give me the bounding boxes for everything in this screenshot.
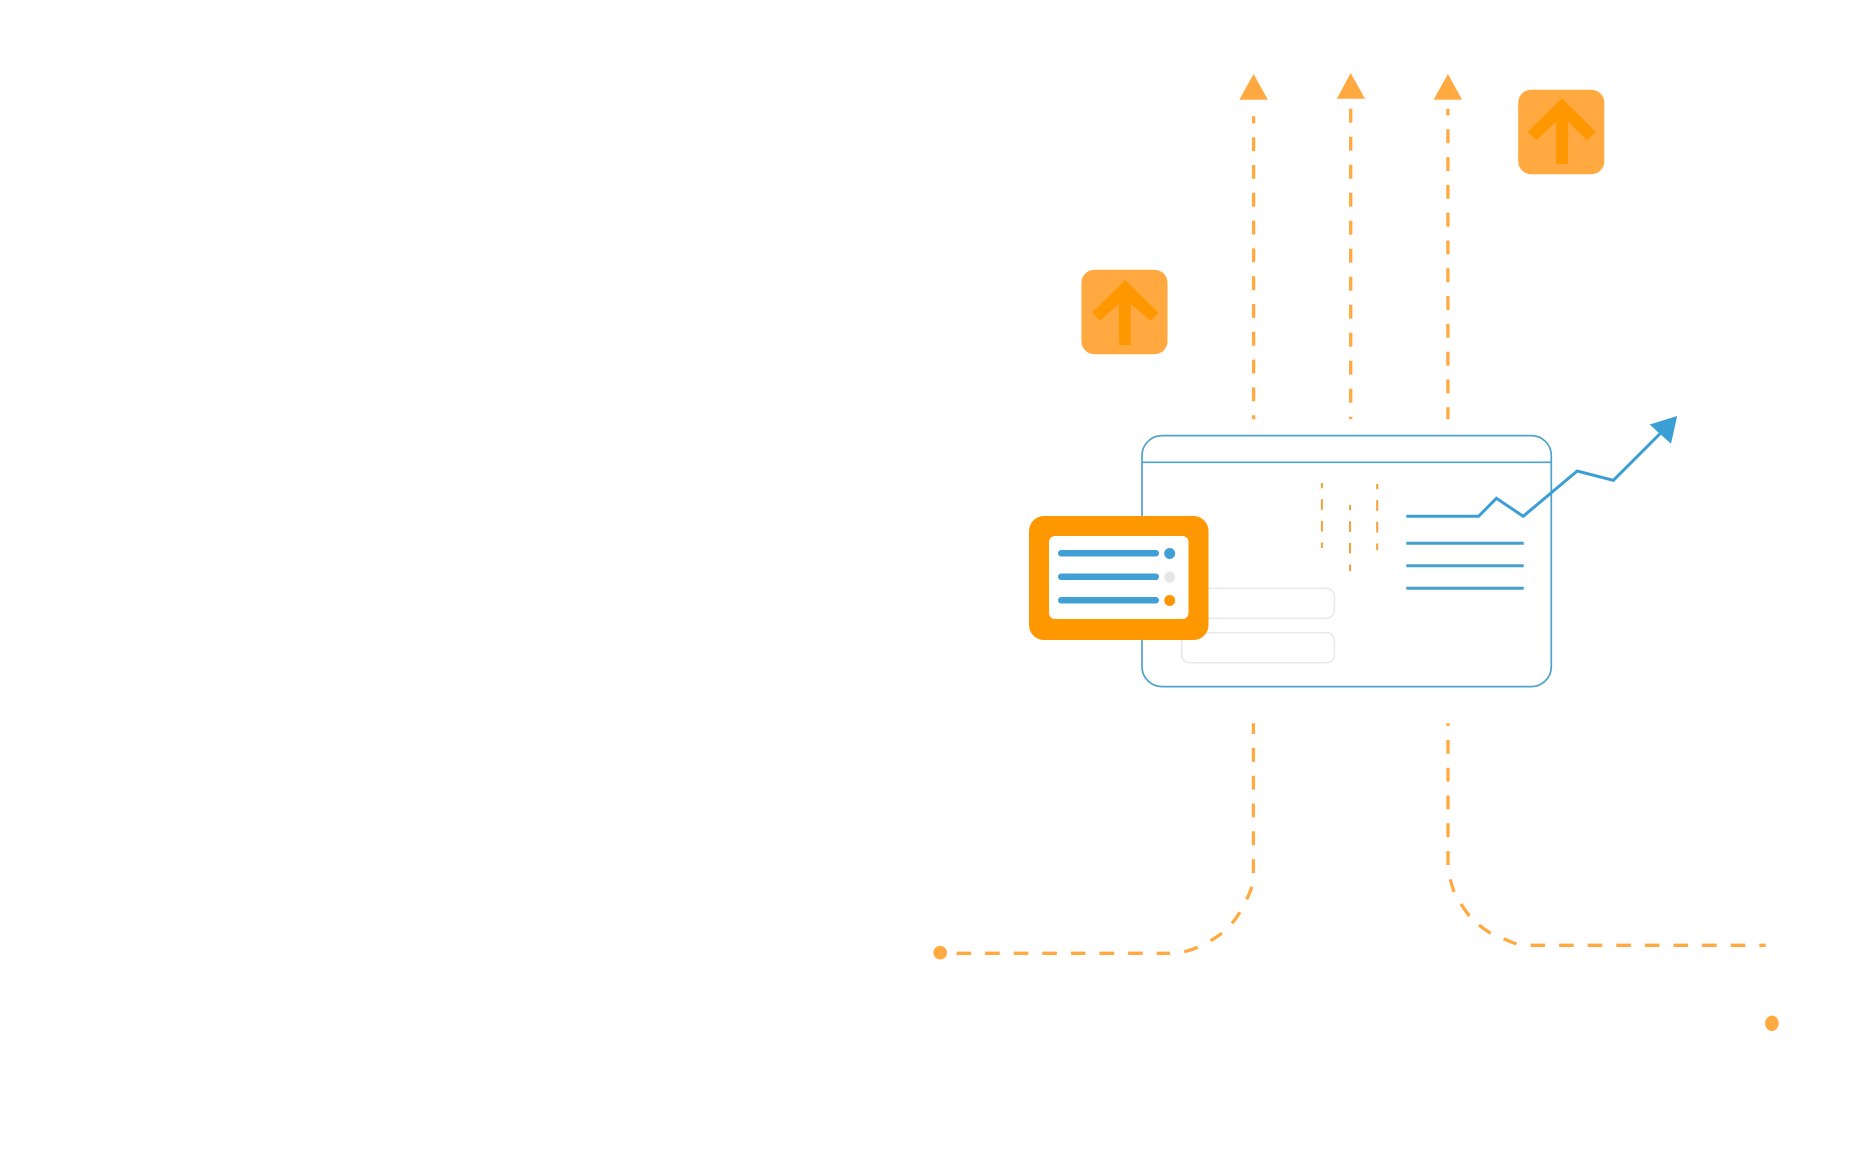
input fields (1182, 588, 1334, 663)
list row 1 (1058, 548, 1175, 559)
list row 2 (1058, 572, 1175, 582)
dashed connector: bottom right (1448, 723, 1779, 1031)
dashed arrow: up right (1434, 74, 1462, 419)
panel: browser window (1142, 436, 1551, 687)
dashed arrow: up centre (1337, 73, 1365, 419)
dashed arrow: up left (1239, 74, 1268, 419)
panel: orange list card (1029, 516, 1208, 640)
icon: upload arrow left (1081, 270, 1168, 354)
chart: rising trend line with arrow (1406, 416, 1677, 516)
icon: upload arrow top right (1518, 90, 1604, 174)
text placeholder lines (1406, 543, 1524, 588)
list row 3 (1058, 595, 1175, 606)
dashed connector: bottom left (933, 723, 1253, 960)
small dashed lines inside window (1322, 483, 1377, 571)
